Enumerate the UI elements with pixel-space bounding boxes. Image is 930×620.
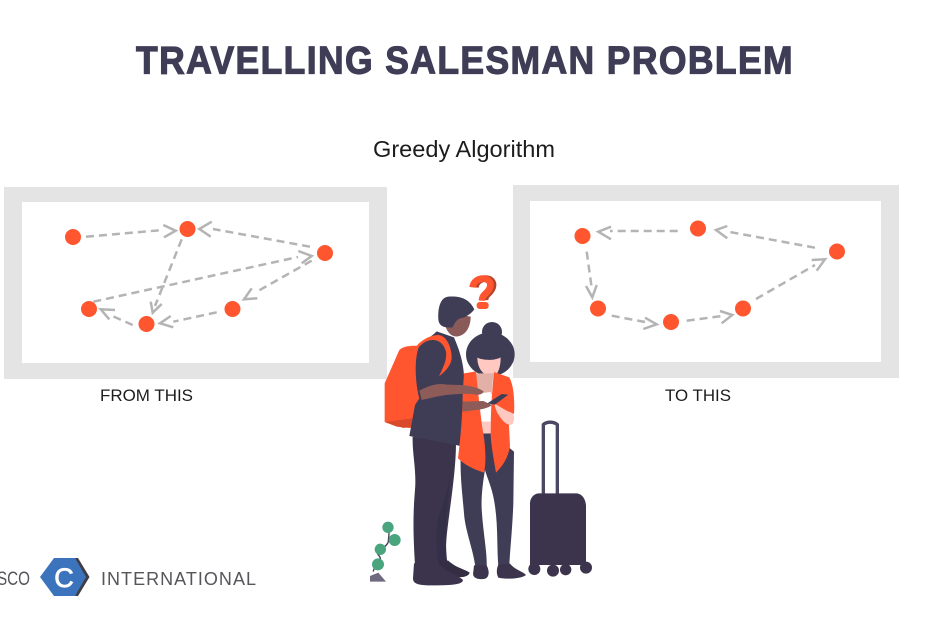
route arrows: greedy tour (587, 231, 815, 322)
title: TRAVELLING SALESMAN PROBLEM (136, 38, 793, 82)
icon: question mark (473, 279, 493, 309)
label: to this: TO THIS (665, 386, 731, 405)
nodes: greedy tour (574, 220, 845, 330)
man trousers (413, 437, 456, 565)
woman forearm and phone (487, 394, 514, 425)
man head (438, 296, 474, 336)
woman cardigan (458, 371, 485, 473)
man arm (419, 384, 484, 400)
backpack (385, 346, 428, 428)
man torso (409, 331, 464, 446)
label: from this: FROM THIS (100, 386, 193, 405)
logo hexagon: C (54, 563, 74, 593)
nodes: unordered tour (65, 221, 333, 332)
panel: to this (513, 185, 899, 378)
woman legs (461, 433, 514, 567)
woman shoes (473, 564, 526, 579)
man shoes (413, 560, 470, 585)
illustration: travellers with suitcase (370, 279, 592, 585)
suitcase (528, 420, 592, 577)
route arrows: unordered tour (86, 229, 312, 325)
panel: from this (4, 187, 387, 379)
plant (370, 522, 401, 582)
woman chest (476, 373, 493, 394)
arrowheads: greedy tour (586, 226, 825, 329)
subtitle: greedy algorithm: Greedy Algorithm (373, 136, 555, 162)
backpack strap (415, 335, 452, 376)
woman head and hair (466, 322, 515, 377)
logo text: international: INTERNATIONAL (101, 569, 256, 589)
logo (0, 558, 256, 596)
logo hexagon (40, 558, 90, 596)
arrowheads: unordered tour (101, 222, 312, 327)
